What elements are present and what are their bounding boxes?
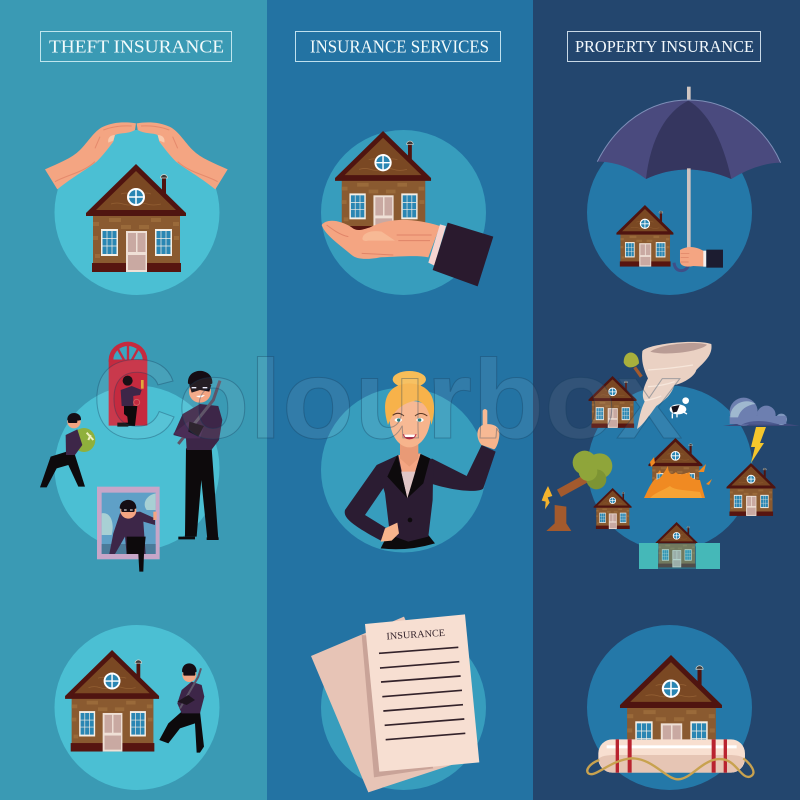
panel: insurance services background [267,0,533,800]
panel: theft insurance background [0,0,267,800]
circle: theft middle [54,386,220,550]
icon: flooded house [639,522,720,569]
illustration: burglar walking away from house [65,650,204,753]
icon: small tree blown by tornado [624,353,641,377]
circle: property top [587,130,752,295]
icon: protecting hands [45,122,228,189]
circle: theft top [54,130,220,295]
circle: services top [321,130,486,295]
back sheet [311,617,467,792]
icon: tornado [637,342,712,429]
watermark: Colourbox [92,337,682,462]
heading: theft insurance [40,32,232,62]
icon: house held in hand [335,131,431,235]
heading: property insurance: PROPERTY INSURANCE [575,37,754,56]
icon: house struck by lightning [727,463,776,516]
icon: house [620,655,722,765]
illustration: house on life buoy [587,655,753,779]
heading: insurance services: INSURANCE SERVICES [310,36,489,56]
icon: house under protecting hands [86,164,186,272]
icon: house under umbrella [616,205,673,267]
icon: flying cow [670,397,689,418]
icon: open hand with suit sleeve [322,220,493,286]
icon: life buoy with rope [587,739,753,779]
heading: property insurance [568,32,760,62]
icon: house near tornado [589,376,637,428]
illustration: businesswoman pointing up [345,371,499,549]
icon: tall burglar with crowbar [173,371,222,540]
heading: insurance services [296,32,500,62]
icon: burglar climbing through window [97,487,160,572]
circle: theft bottom [54,625,220,790]
illustration: burglars around a break-in [40,342,222,572]
circle: property bottom [587,625,752,790]
icon: storm cloud [723,398,800,426]
icon: umbrella held by hand [597,87,781,271]
icon: lightning bolt [751,427,766,463]
icon: burning house [644,438,712,498]
illustration: disasters threatening houses [542,342,800,569]
circle: services middle [321,388,486,552]
illustration: insurance documents [311,614,479,792]
icon: house [65,650,159,752]
icon: tree felled by lightning [542,451,612,531]
panel: property insurance background [533,0,800,800]
icon: red door with kneeling burglar [109,342,147,427]
document title: INSURANCE [386,628,445,642]
document text lines [379,647,465,740]
circle: property middle [588,386,752,550]
icon: house with broken tree [594,488,632,529]
heading: theft insurance: THEFT INSURANCE [49,36,224,56]
icon: sneaking burglar [159,663,204,753]
icon: burglar with money bag [40,413,95,487]
front sheet [365,614,479,772]
circle: services bottom [321,625,486,790]
